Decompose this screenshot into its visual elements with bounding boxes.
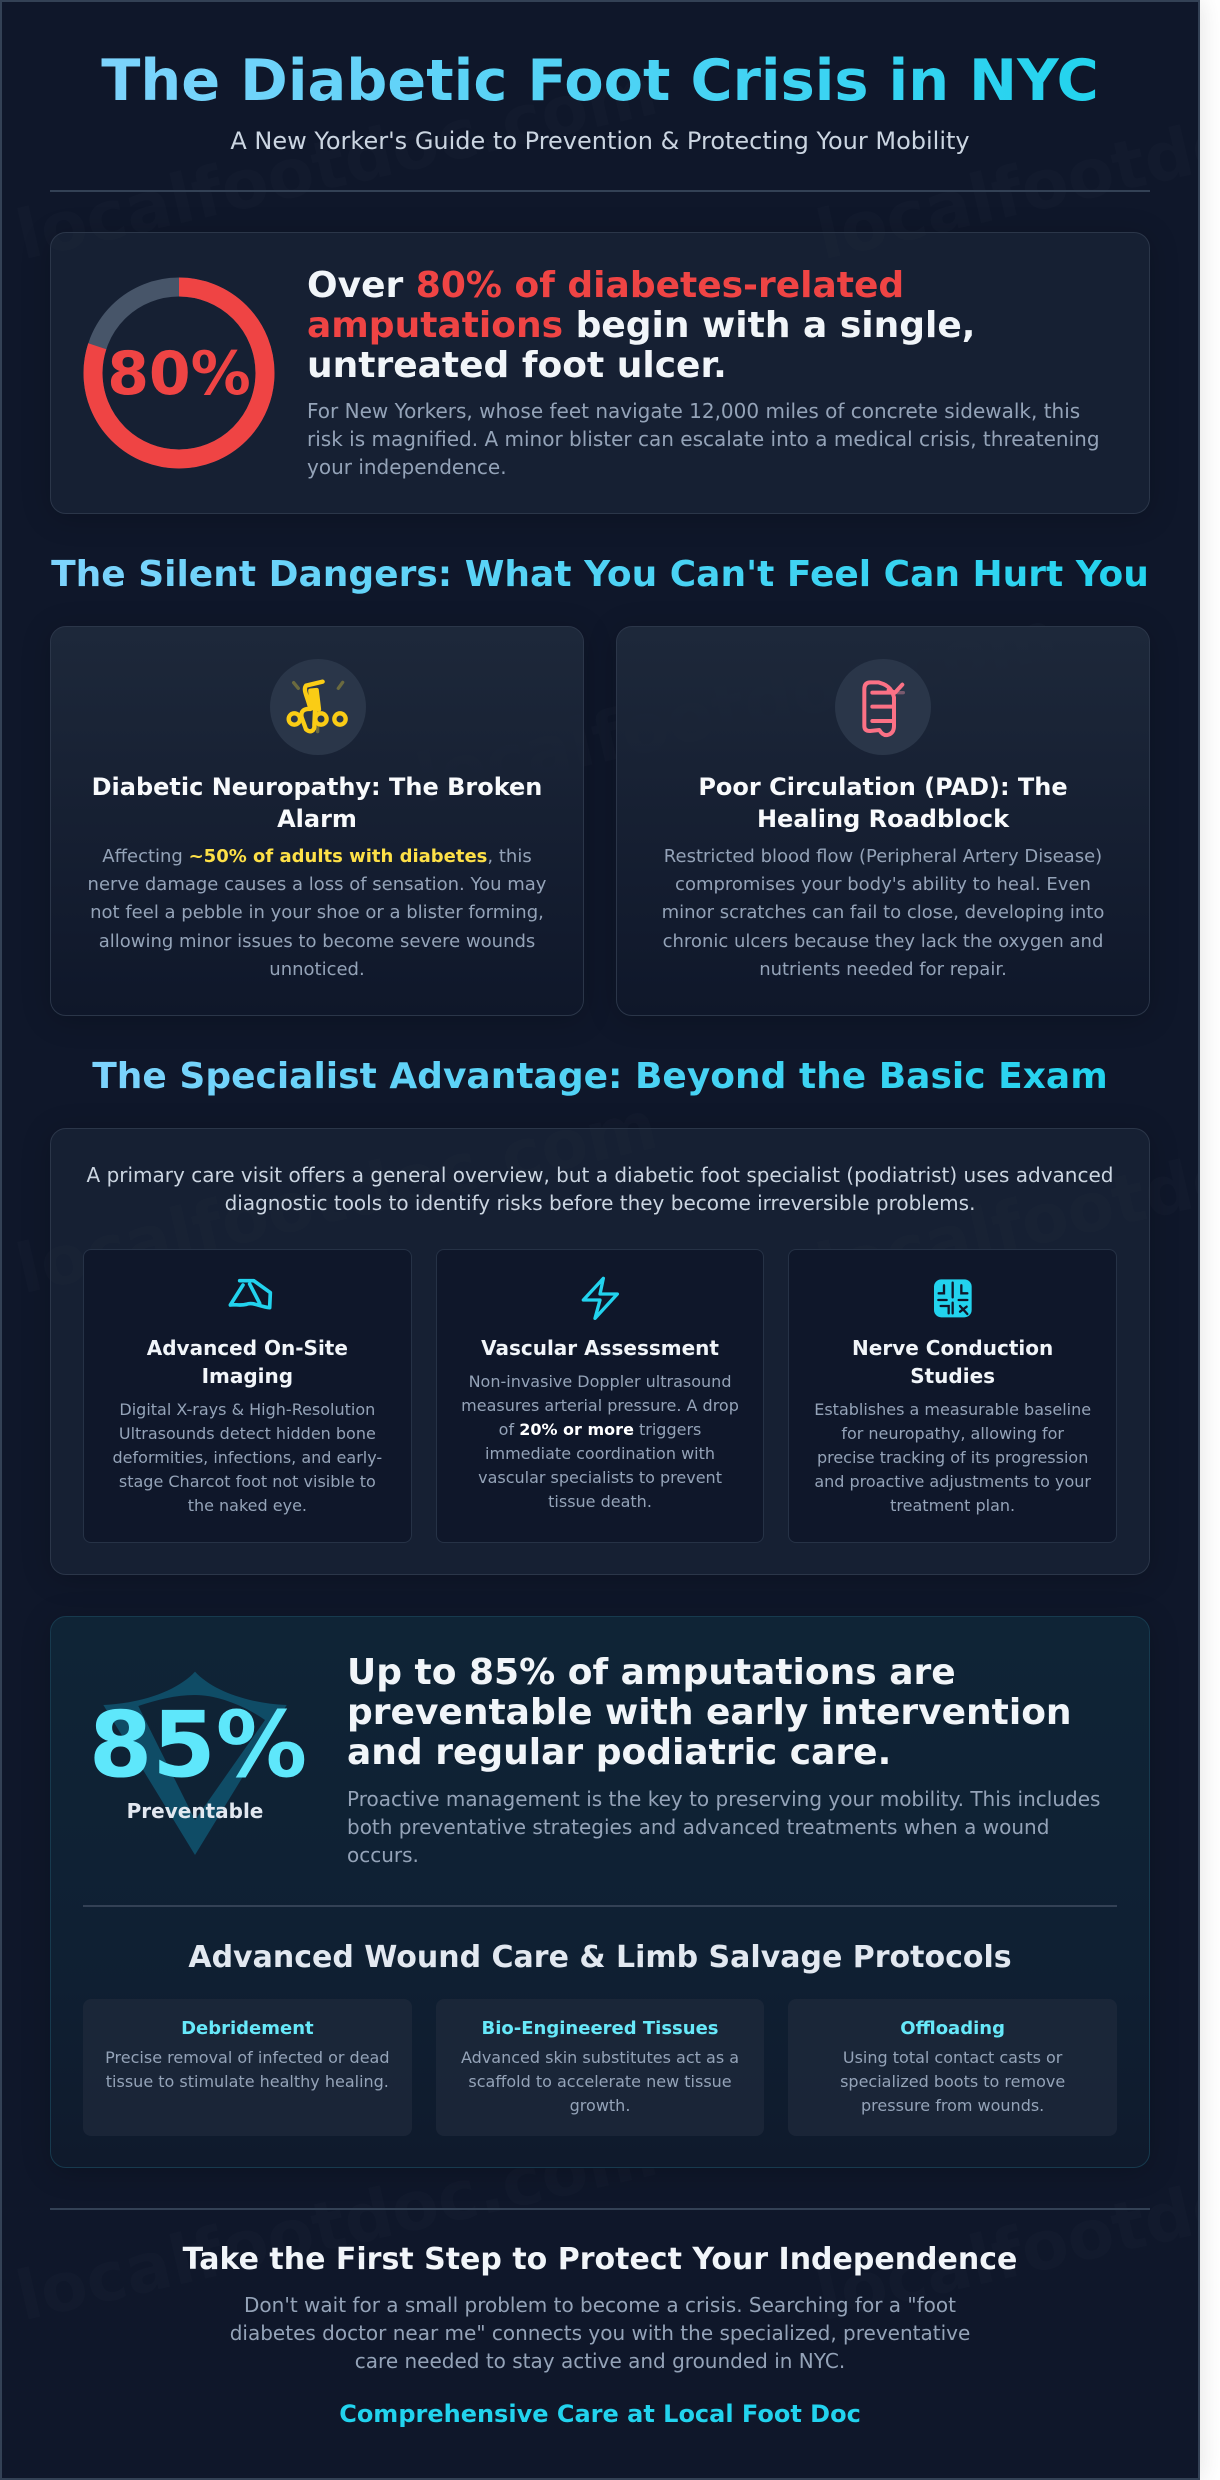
footer call to action: Comprehensive Care at Local Foot Doc	[339, 2400, 861, 2428]
text: neuropathy: Affecting ~50% of adults with diabetes, this	[102, 846, 532, 867]
subtitle: A New Yorker's Guide to Prevention & Protecting Your Mobility	[230, 127, 970, 155]
stat description: your independence.	[307, 455, 507, 479]
text: vascular: Non-invasive Doppler ultrasound	[469, 1372, 731, 1391]
card: nerve	[788, 1249, 1117, 1543]
prevention headline: Up to 85% of amputations are	[347, 1652, 956, 1693]
stat headline	[307, 265, 975, 386]
heading: protocols: Advanced Wound Care & Limb Salvage Protocols	[188, 1940, 1012, 1975]
stat label: Preventable	[127, 1799, 263, 1823]
text: imaging: the naked eye.	[188, 1496, 307, 1515]
heading: imaging: Imaging	[202, 1364, 293, 1388]
heading: nerve: Studies	[910, 1364, 995, 1388]
heading: neuropathy: Alarm	[277, 805, 357, 833]
text: specialist intro	[86, 1163, 1113, 1215]
stat headline: untreated foot ulcer.	[307, 345, 727, 386]
text: nerve: treatment plan.	[890, 1496, 1015, 1515]
stat description: risk is magnified. A minor blister can escalate into a medical crisis, threatening	[307, 427, 1100, 451]
text: specialist intro: diagnostic tools to identify risks before they become irreversible problems.	[225, 1191, 975, 1215]
heading: silent dangers: The Silent Dangers: What You Can't Feel Can Hurt You	[51, 554, 1149, 595]
text: imaging: Digital X-rays & High-Resolution	[119, 1400, 375, 1419]
prevention headline: and regular podiatric care.	[347, 1732, 891, 1773]
stat headline: amputations begin with a single,	[307, 305, 975, 346]
footer text: Don't wait for a small problem to become a crisis. Searching for a "foot	[244, 2293, 956, 2317]
text: debridement	[105, 2048, 390, 2091]
card: debridement	[83, 1999, 412, 2136]
prevention text: both preventative strategies and advanced treatments when a wound	[347, 1815, 1049, 1839]
text: nerve: for neuropathy, allowing for	[841, 1424, 1064, 1443]
text: circulation: compromises your body's ability to heal. Even	[675, 874, 1091, 895]
icon: shield	[104, 1672, 286, 1855]
panel: specialist	[50, 1128, 1150, 1575]
stat description	[307, 399, 1100, 479]
text: localfootdoc.com	[409, 1606, 1065, 1830]
icon: circulation	[835, 659, 931, 755]
text: neuropathy: allowing minor issues to become severe wounds	[99, 931, 535, 952]
text: imaging	[113, 1400, 382, 1515]
heading: debridement: Debridement	[181, 2018, 314, 2039]
text: nerve: precise tracking of its progression	[817, 1448, 1088, 1467]
text: offloading: Using total contact casts or	[843, 2048, 1062, 2067]
heading: nerve: Nerve Conduction	[852, 1336, 1053, 1360]
text: debridement: tissue to stimulate healthy healing.	[106, 2072, 389, 2091]
text: circulation: minor scratches can fail to close, developing into	[662, 902, 1104, 923]
footer heading: Take the First Step to Protect Your Independence	[183, 2242, 1017, 2277]
heading: circulation	[698, 773, 1068, 833]
heading: imaging	[146, 1336, 348, 1388]
text: circulation: chronic ulcers because they lack the oxygen and	[663, 931, 1103, 952]
heading: nerve	[852, 1336, 1053, 1388]
text: nerve	[814, 1400, 1091, 1515]
text: neuropathy: not feel a pebble in your shoe or a blister forming,	[90, 902, 544, 923]
footer text: diabetes doctor near me" connects you with the specialized, preventative	[230, 2321, 970, 2345]
card: tissues	[436, 1999, 764, 2136]
text: neuropathy	[88, 846, 546, 980]
prevention headline: preventable with early intervention	[347, 1692, 1072, 1733]
prevention text: occurs.	[347, 1843, 419, 1867]
heading: specialist advantage: The Specialist Advantage: Beyond the Basic Exam	[92, 1056, 1108, 1097]
text: localfootdoc.com	[9, 52, 665, 276]
text: offloading: specialized boots to remove	[840, 2072, 1065, 2091]
heading: circulation: Healing Roadblock	[757, 805, 1009, 833]
prevention text	[347, 1787, 1100, 1867]
stat description: For New Yorkers, whose feet navigate 12,000 miles of concrete sidewalk, this	[307, 399, 1080, 423]
text: nerve: and proactive adjustments to your	[814, 1472, 1091, 1491]
panel: neuropathy	[50, 626, 584, 1016]
text: offloading	[840, 2048, 1065, 2115]
footer text	[230, 2293, 970, 2373]
text: circulation: nutrients needed for repair.	[759, 959, 1007, 980]
heading: imaging: Advanced On-Site	[147, 1336, 348, 1360]
heading: neuropathy: Diabetic Neuropathy: The Broken	[92, 773, 542, 801]
icon: brain	[934, 1279, 972, 1318]
text: vascular: tissue death.	[548, 1492, 652, 1511]
text: localfootdoc.com	[409, 596, 1065, 820]
text: circulation	[662, 846, 1104, 980]
text: vascular: immediate coordination with	[485, 1444, 715, 1463]
prevention text: Proactive management is the key to preserving your mobility. This includes	[347, 1787, 1100, 1811]
panel: prevention	[50, 1616, 1150, 2168]
text: debridement: Precise removal of infected or dead	[105, 2048, 390, 2067]
panel: circulation	[616, 626, 1150, 1016]
icon: bolt	[582, 1276, 620, 1320]
text: localfootdoc.com	[9, 1086, 665, 1310]
title: The Diabetic Foot Crisis in NYC	[101, 47, 1099, 114]
text: vascular	[461, 1372, 739, 1511]
text: imaging: stage Charcot foot not visible to	[119, 1472, 376, 1491]
donut chart: 80%: 80%	[107, 339, 251, 409]
text: tissues: Advanced skin substitutes act as a	[461, 2048, 739, 2067]
heading: offloading: Offloading	[900, 2018, 1005, 2039]
card: offloading	[788, 1999, 1117, 2136]
heading: tissues: Bio-Engineered Tissues	[482, 2018, 719, 2039]
donut chart: 80%	[84, 278, 274, 468]
heading: circulation: Poor Circulation (PAD): The	[698, 773, 1068, 801]
text: neuropathy: unnoticed.	[269, 959, 365, 980]
text: circulation: Restricted blood flow (Peripheral Artery Disease)	[664, 846, 1102, 867]
text: vascular: vascular specialists to prevent	[478, 1468, 722, 1487]
text: localfootdoc.com	[9, 2113, 665, 2337]
text: imaging: Ultrasounds detect hidden bone	[119, 1424, 376, 1443]
text: tissues	[461, 2048, 739, 2115]
text: offloading: pressure from wounds.	[861, 2096, 1044, 2115]
text: neuropathy: nerve damage causes a loss of sensation. You may	[88, 874, 546, 895]
panel: 80% statistic	[50, 232, 1150, 514]
text: tissues: scaffold to accelerate new tissue	[468, 2072, 732, 2091]
icon: imaging	[228, 1278, 272, 1310]
heading: neuropathy	[92, 773, 542, 833]
icon: neuropathy	[270, 659, 366, 755]
footer text: care needed to stay active and grounded in NYC.	[355, 2349, 845, 2373]
card: imaging	[83, 1249, 412, 1543]
stat headline: Over 80% of diabetes-related	[307, 265, 904, 306]
text: specialist intro: A primary care visit offers a general overview, but a diabetic foot specialist (podiatrist) uses advanced	[87, 1163, 1113, 1187]
heading: vascular: Vascular Assessment	[481, 1336, 719, 1360]
text: vascular: of 20% or more triggers	[499, 1420, 701, 1439]
card: vascular	[436, 1249, 764, 1543]
text: nerve: Establishes a measurable baseline	[814, 1400, 1091, 1419]
stat: 85%: 85%	[89, 1691, 307, 1798]
prevention headline	[347, 1652, 1072, 1773]
text: imaging: deformities, infections, and early-	[113, 1448, 382, 1467]
text: tissues: growth.	[570, 2096, 630, 2115]
text: vascular: measures arterial pressure. A drop	[461, 1396, 739, 1415]
